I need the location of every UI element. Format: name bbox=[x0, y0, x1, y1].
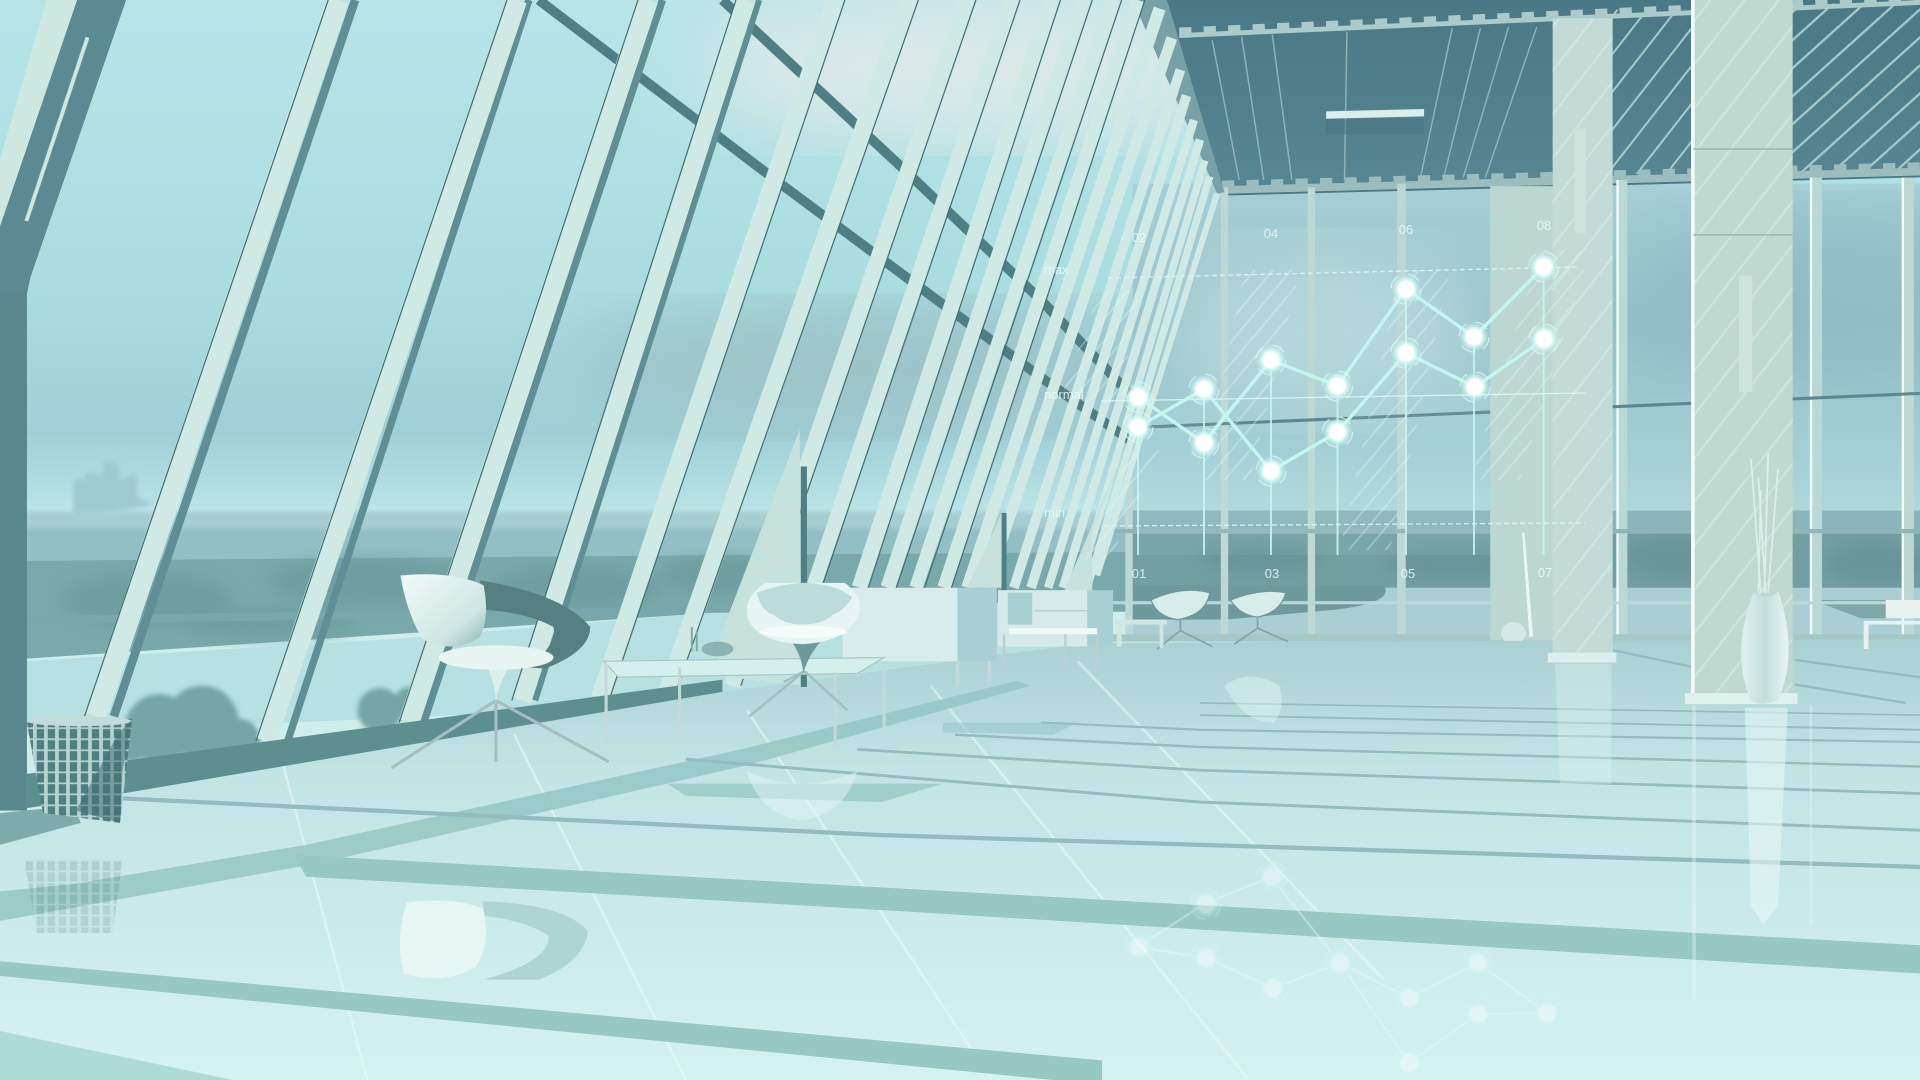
axis labels: min bbox=[1044, 505, 1065, 520]
axis labels: 04 bbox=[1264, 226, 1278, 241]
data line one bbox=[1138, 267, 1544, 443]
back column bbox=[1490, 186, 1554, 644]
axis labels: 03 bbox=[1265, 566, 1279, 581]
axis labels: normal bbox=[1044, 387, 1084, 402]
pillar: front bbox=[1685, 0, 1798, 704]
data line two bbox=[1138, 339, 1544, 471]
chart reference lines bbox=[1101, 267, 1585, 526]
chart floor reflection bbox=[1124, 862, 1562, 1078]
axis labels: 01 bbox=[1132, 566, 1146, 581]
floor shadows bbox=[0, 650, 1920, 1080]
axis labels bbox=[1044, 218, 1552, 581]
left corner frame bbox=[0, 0, 126, 811]
chart drop lines bbox=[1138, 267, 1544, 555]
chair: by the table bbox=[747, 583, 860, 716]
wall corner band bbox=[1133, 0, 1224, 193]
waste basket bbox=[27, 716, 132, 823]
window mullions bbox=[84, 0, 1217, 741]
pillar: middle bbox=[1548, 18, 1616, 662]
axis labels: 08 bbox=[1537, 218, 1551, 233]
axis labels: 02 bbox=[1132, 230, 1146, 245]
window sill bbox=[0, 680, 722, 845]
axis labels: 07 bbox=[1538, 565, 1552, 580]
back window frames bbox=[1092, 178, 1920, 642]
chart data points bbox=[1123, 252, 1559, 486]
crossbeams bbox=[539, 0, 1129, 440]
vase with branches bbox=[1741, 453, 1789, 704]
chart light fill bbox=[1138, 339, 1544, 555]
sky and clouds bbox=[0, 0, 1920, 539]
sofas and far furniture bbox=[842, 588, 1920, 687]
axis labels: 06 bbox=[1399, 222, 1413, 237]
floor reflections of mullions bbox=[282, 661, 1384, 1080]
wedge pillar two bbox=[967, 430, 1133, 606]
ceiling bbox=[1133, 0, 1920, 195]
handrail bbox=[24, 606, 747, 624]
landscape: distant city, forest and river bbox=[24, 460, 1920, 763]
chart hatching bbox=[1060, 250, 1590, 560]
axis labels: 05 bbox=[1401, 566, 1415, 581]
axis labels: max bbox=[1044, 262, 1069, 277]
chair: front left bbox=[392, 574, 609, 768]
wedge pillar one bbox=[716, 430, 807, 687]
floor object reflections bbox=[24, 664, 1812, 999]
floor bbox=[0, 639, 1920, 1080]
coffee table bbox=[604, 627, 884, 747]
